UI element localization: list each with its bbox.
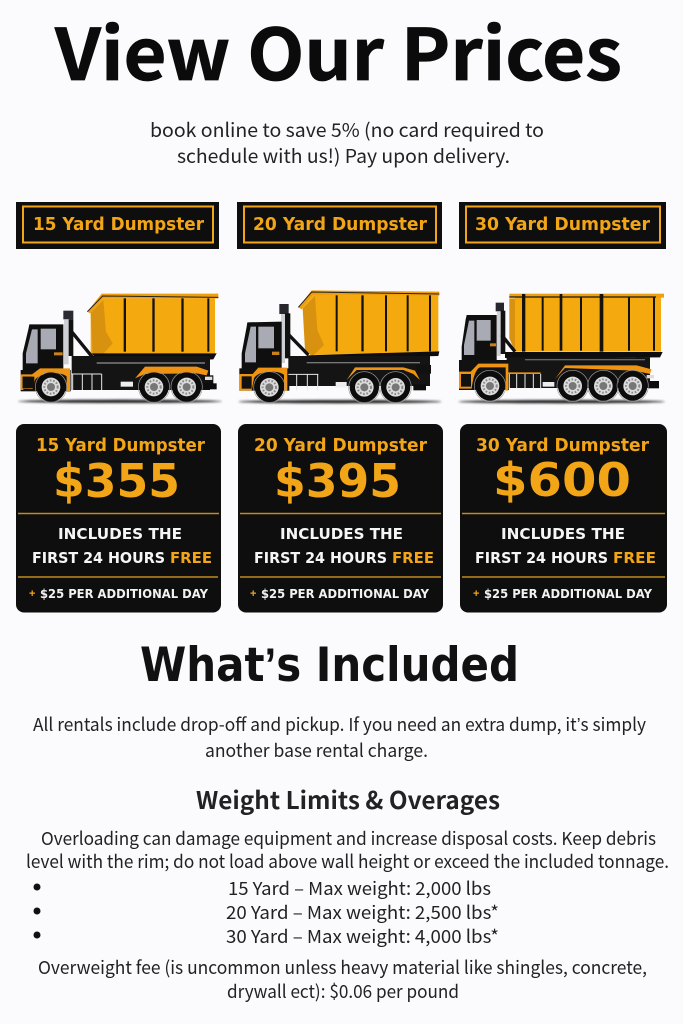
price: $395 <box>274 454 401 508</box>
overweight fee: Overweight fee (is uncommon unless heavy material like shingles, concrete, <box>38 954 647 980</box>
included hours: FIRST 24 HOURS <box>32 549 165 567</box>
truck: 30 yard <box>458 294 665 403</box>
weight limit list <box>34 875 499 949</box>
intro text: book online to save 5% (no card required to <box>150 116 544 143</box>
truck: 15 yard <box>18 294 222 403</box>
included hours: FREE <box>170 549 212 567</box>
included hours <box>475 525 656 567</box>
additional day fee: + <box>250 588 256 600</box>
banner: 20 yard: 20 Yard Dumpster <box>253 214 427 235</box>
included description <box>33 711 647 763</box>
included description: another base rental charge. <box>205 737 428 763</box>
banner: 30 yard <box>459 202 666 249</box>
included hours: INCLUDES THE <box>280 525 403 543</box>
banner: 15 yard <box>16 202 219 249</box>
overweight fee: drywall ect): $0.06 per pound <box>227 978 459 1004</box>
banner: 30 yard: 30 Yard Dumpster <box>475 214 650 235</box>
price: $600 <box>493 453 631 507</box>
card heading: 15 Yard Dumpster <box>36 435 205 456</box>
overloading text: level with the rim; do not load above wall height or exceed the included tonnage. <box>26 848 669 874</box>
additional day fee: + <box>473 588 479 600</box>
additional day fee: $25 PER ADDITIONAL DAY <box>40 586 209 601</box>
included description: All rentals include drop-off and pickup. If you need an extra dump, it’s simply <box>33 711 647 737</box>
banner: 20 yard <box>237 202 442 249</box>
price: $355 <box>53 454 180 508</box>
included hours <box>32 525 212 567</box>
included hours: FIRST 24 HOURS <box>475 549 608 567</box>
overloading text: Overloading can damage equipment and increase disposal costs. Keep debris <box>41 825 656 851</box>
intro text: schedule with us!) Pay upon delivery. <box>177 142 510 169</box>
card heading: 20 Yard Dumpster <box>254 435 427 456</box>
additional day fee: $25 PER ADDITIONAL DAY <box>261 586 430 601</box>
included hours: FREE <box>392 549 434 567</box>
included hours: FIRST 24 HOURS <box>254 549 387 567</box>
title: View Our Prices <box>54 0 622 101</box>
heading: what's included: What’s Included <box>140 638 519 693</box>
weight limit list: 30 Yard – Max weight: 4,000 lbs* <box>226 923 499 949</box>
banner: 15 yard: 15 Yard Dumpster <box>33 214 204 235</box>
included hours: INCLUDES THE <box>58 525 182 543</box>
included hours <box>254 525 434 567</box>
additional day fee: $25 PER ADDITIONAL DAY <box>484 586 653 601</box>
weight limit list: 20 Yard – Max weight: 2,500 lbs* <box>226 899 499 925</box>
panel: 20 yard price card <box>238 424 443 612</box>
additional day fee: + <box>29 588 35 600</box>
panel: 15 yard price card <box>16 424 221 612</box>
panel: 30 yard price card <box>460 424 667 612</box>
overweight fee <box>38 954 647 1004</box>
intro text <box>150 116 544 169</box>
weight limit list: 15 Yard – Max weight: 2,000 lbs <box>228 875 491 901</box>
included hours: FREE <box>613 549 656 567</box>
included hours: INCLUDES THE <box>501 525 625 543</box>
overloading text <box>26 825 669 874</box>
truck: 20 yard <box>238 290 442 403</box>
card heading: 30 Yard Dumpster <box>476 435 649 456</box>
heading: weight limits: Weight Limits & Overages <box>196 781 500 816</box>
